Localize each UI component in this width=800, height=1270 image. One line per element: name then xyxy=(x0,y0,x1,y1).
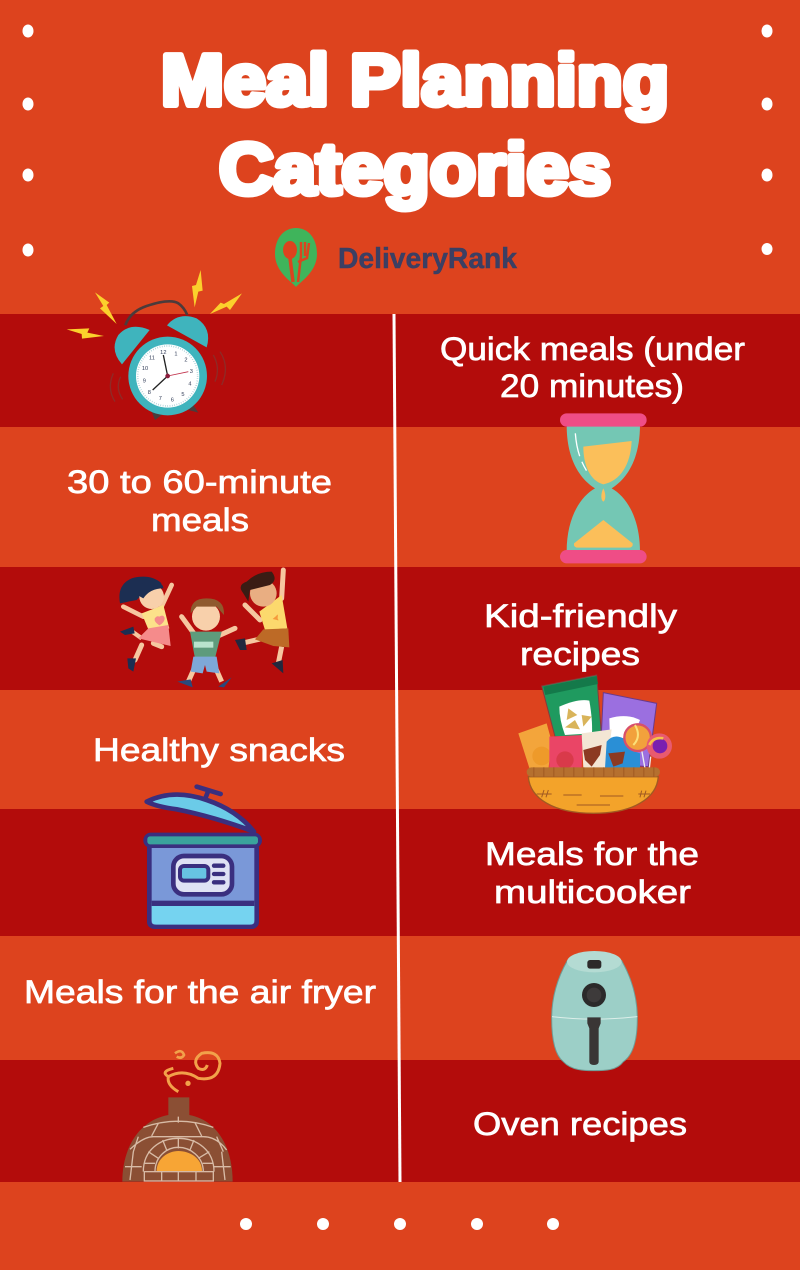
label: healthy snacks: Healthy snacks xyxy=(93,732,345,768)
icon: alarm clock: 4 xyxy=(188,381,192,387)
icon: alarm clock xyxy=(67,270,242,420)
label: meals for the air fryer: Meals for the air fryer xyxy=(24,974,376,1010)
icon: alarm clock: 12 xyxy=(160,350,166,356)
title: Categories xyxy=(219,130,611,210)
icon: snack basket xyxy=(518,675,672,813)
label: oven recipes: Oven recipes xyxy=(473,1106,687,1142)
title: Meal Planning xyxy=(161,41,669,121)
icon: alarm clock: 2 xyxy=(184,358,188,364)
kid: boy with star shirt xyxy=(235,570,289,673)
kid: boy xyxy=(177,598,235,687)
icon: alarm clock: 6 xyxy=(171,397,174,403)
icon: alarm clock: 7 xyxy=(159,396,162,402)
label: meals for the multicooker: multicooker xyxy=(494,874,691,910)
icon: alarm clock: 9 xyxy=(143,379,146,385)
title xyxy=(161,41,669,210)
icon: three jumping kids xyxy=(119,570,289,687)
kid: girl xyxy=(119,577,172,672)
label: quick meals: 20 minutes) xyxy=(500,368,684,404)
icon: multicooker xyxy=(143,787,262,927)
icon: alarm clock: 11 xyxy=(149,356,155,362)
icon: alarm clock: 5 xyxy=(181,392,185,398)
label: 30 to 60-minute meals: 30 to 60-minute xyxy=(67,464,332,500)
row bands xyxy=(0,314,800,1182)
logo: DeliveryRank xyxy=(275,228,518,287)
label: kid-friendly recipes: recipes xyxy=(520,636,640,672)
icon: alarm clock: 1 xyxy=(174,351,178,357)
label: quick meals: Quick meals (under xyxy=(440,331,745,367)
icon: alarm clock: 3 xyxy=(190,369,193,375)
center divider xyxy=(394,314,400,1182)
label: meals for the multicooker: Meals for the xyxy=(485,836,699,872)
icon: brick oven xyxy=(122,1051,233,1182)
icon: air fryer xyxy=(552,951,637,1071)
label: 30 to 60-minute meals: meals xyxy=(151,502,249,538)
icon: alarm clock: 10 xyxy=(142,366,148,372)
logo: DeliveryRank: DeliveryRank xyxy=(338,243,518,275)
icon: hourglass xyxy=(560,413,647,563)
label: kid-friendly recipes: Kid-friendly xyxy=(484,598,677,634)
icon: alarm clock: 8 xyxy=(148,390,151,396)
